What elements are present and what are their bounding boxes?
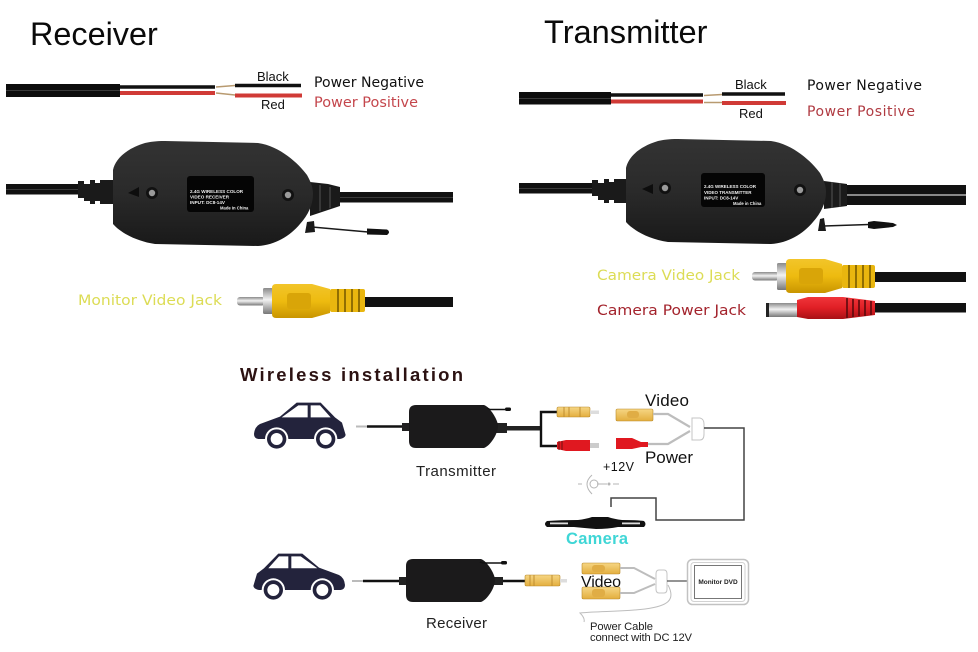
label: Monitor Video Jack: Monitor Video Jack [78, 293, 223, 309]
label: Video: Video [581, 574, 621, 591]
module label: INPUT: DC8-14V [190, 200, 226, 205]
label: Power Negative: Power Negative [314, 75, 424, 91]
camera harness wires [648, 414, 704, 444]
small module [402, 423, 507, 433]
module label: INPUT: DC8-14V [704, 196, 738, 200]
label: Power Cable connect with DC 12V [590, 621, 693, 644]
label: Camera Power Jack: Camera Power Jack [597, 303, 747, 319]
module label: Made in China [733, 201, 762, 206]
right cable [338, 192, 453, 202]
label: Red: Red [261, 97, 285, 112]
black wire [120, 86, 301, 87]
bare copper ends [216, 86, 235, 95]
split wires [541, 412, 557, 446]
harness junction [656, 570, 667, 593]
module label: 2.4G WIRELESS COLOR [704, 184, 757, 189]
icon: car, transmitter row [253, 403, 350, 451]
icon: yellow mini RCA plug, receiver [525, 575, 567, 586]
module label: VIDEO TRANSMITTER [704, 190, 752, 195]
panel: receiver module [6, 141, 453, 246]
module label: Made in China [220, 206, 249, 210]
label: Black: Black [257, 69, 289, 84]
sheathed cable [6, 84, 120, 97]
panel: receiver in diagram [352, 559, 526, 632]
icon: monitor DVD: Monitor DVD [698, 579, 738, 586]
label: Power: Power [645, 448, 693, 467]
module body [113, 141, 313, 246]
label: +12V: +12V [603, 460, 635, 474]
label: Receiver: Receiver [426, 615, 487, 632]
module label [187, 176, 254, 212]
cable in [367, 425, 405, 428]
panel: transmitter module [519, 139, 966, 244]
screw right [282, 189, 294, 201]
label: Video: Video [645, 391, 689, 410]
harness junction [692, 418, 704, 440]
small antenna [487, 408, 505, 410]
label: Black: Black [735, 77, 767, 92]
label: Power Negative: Power Negative [807, 78, 922, 94]
power cable [580, 585, 671, 622]
stripped wire end [352, 580, 363, 582]
heading: Transmitter: Transmitter [544, 13, 708, 50]
label: Power Positive: Power Positive [807, 104, 915, 120]
small antenna [480, 562, 502, 563]
bare copper ends [704, 94, 722, 102]
screw left [146, 187, 158, 199]
label: Camera: Camera [566, 530, 629, 548]
module label: 2.4G WIRELESS COLOR [190, 189, 244, 194]
icon: yellow mini RCA socket, lower [582, 587, 620, 599]
label: Red: Red [739, 106, 763, 121]
antenna [818, 218, 897, 231]
cable out [503, 580, 526, 582]
label: Power Positive: Power Positive [314, 95, 418, 111]
label: Power Cable connect with DC 12V: Power Cable [590, 621, 653, 633]
red wire [611, 102, 786, 103]
icon: red mini socket [616, 438, 648, 449]
icon: yellow mini RCA socket, upper [582, 563, 620, 574]
screw right [794, 184, 806, 196]
cable in [363, 580, 402, 582]
panel: transmitter in diagram [356, 405, 557, 480]
label: Camera Video Jack: Camera Video Jack [597, 268, 741, 284]
panel: receiver power wires [6, 69, 424, 112]
black wire [611, 94, 785, 95]
heading: Wireless installation: Wireless installation [240, 364, 463, 385]
module body [626, 139, 826, 244]
direction triangle [128, 187, 139, 197]
module label: VIDEO RECEIVER [190, 194, 230, 200]
icon: yellow mini RCA plug [557, 407, 599, 417]
icon: yellow RCA plug, transmitter [752, 259, 966, 293]
monitor cable [667, 580, 687, 582]
icon: licence plate camera [545, 517, 646, 529]
left cable [519, 183, 594, 194]
direction triangle [642, 184, 653, 194]
icon: red DC power plug [766, 297, 966, 319]
module label [701, 173, 765, 207]
strain reliefs [78, 180, 114, 204]
icon: polarity symbol [578, 475, 619, 494]
icon: red mini plug [557, 440, 599, 451]
red wire [120, 93, 302, 96]
icon: yellow mini RCA socket [616, 409, 653, 421]
right double cable [845, 185, 966, 205]
left cable [6, 184, 80, 194]
heading: Receiver: Receiver [30, 16, 158, 52]
icon: yellow RCA plug, receiver [237, 284, 453, 318]
label: Transmitter: Transmitter [416, 463, 496, 480]
label: Power Cable connect with DC 12V: connect with DC 12V [590, 632, 693, 644]
icon: car, receiver row [249, 554, 346, 602]
icon: monitor DVD [688, 560, 748, 604]
strain reliefs [592, 179, 627, 203]
thick cable [507, 426, 540, 430]
monitor harness wires [580, 568, 671, 622]
small module [399, 577, 503, 585]
screw left [659, 182, 671, 194]
panel: transmitter power wires [519, 77, 922, 121]
antenna [305, 221, 389, 235]
stripped wire end [356, 426, 367, 428]
sheathed cable [519, 92, 611, 104]
camera cable [611, 428, 744, 520]
